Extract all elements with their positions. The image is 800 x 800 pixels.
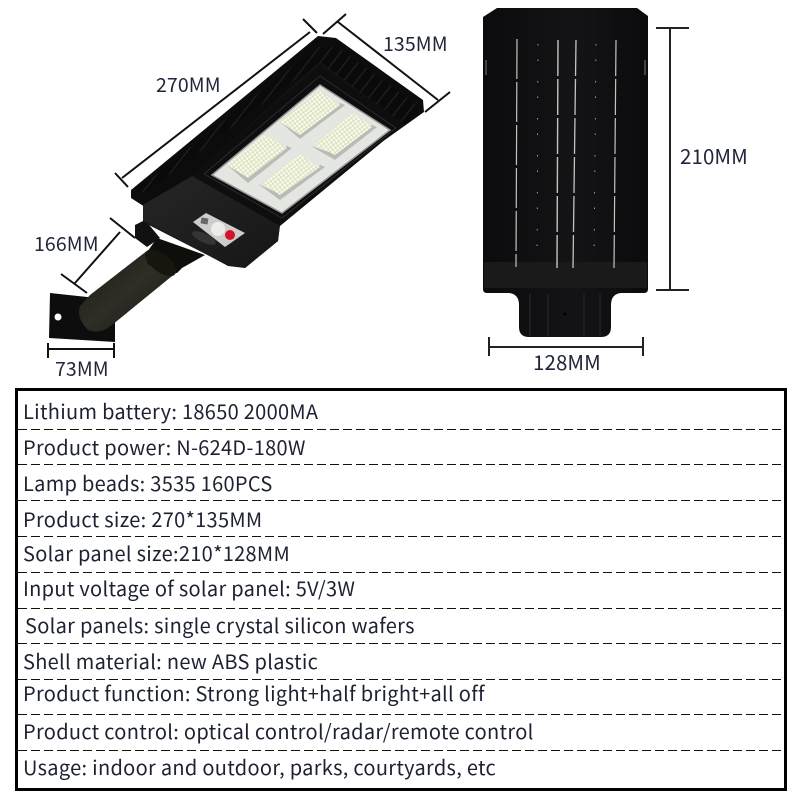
spec: product function: Product function: Strong light+half bright+all off	[23, 678, 485, 707]
dimension: 128MM: 128MM	[533, 346, 601, 376]
dimension: 135MM	[323, 14, 450, 112]
specification table	[15, 388, 787, 791]
spec: product size: Product size: 270*135MM	[23, 504, 262, 533]
LED module right	[311, 113, 377, 160]
dimension: 270MM	[115, 19, 317, 187]
spec: input voltage: Input voltage of solar panel: 5V/3W	[23, 573, 355, 602]
dimension: 166MM: 166MM	[34, 228, 99, 257]
dimension: 135MM: 135MM	[383, 28, 448, 57]
dimension: 210MM: 210MM	[680, 140, 748, 170]
lamp body	[143, 62, 404, 268]
sensor panel	[190, 213, 245, 248]
spec: lithium battery: Lithium battery: 18650 2000MA	[23, 396, 318, 425]
dimension: 270MM: 270MM	[156, 69, 221, 98]
dimension: 73MM: 73MM	[55, 353, 109, 382]
dimension: 73MM	[48, 343, 114, 382]
dimension: 166MM	[34, 218, 135, 293]
product photo: solar street light	[49, 36, 424, 342]
LED module bottom	[258, 155, 325, 200]
solar panel rear view	[483, 8, 648, 337]
LED module top	[280, 90, 345, 139]
LED module left	[227, 135, 292, 183]
spec: product control: Product control: optical control/radar/remote control	[23, 716, 534, 745]
spec: solar panel size: Solar panel size:210*128MM	[23, 538, 290, 567]
spec: usage: Usage: indoor and outdoor, parks, courtyards, etc	[23, 752, 496, 781]
dimension: 128MM	[489, 337, 643, 376]
spec: shell material: Shell material: new ABS plastic	[23, 646, 318, 675]
dimension: 210MM	[656, 28, 748, 290]
solar cell bus lines	[486, 39, 645, 268]
mounting pole	[79, 220, 205, 332]
spec: product power: Product power: N-624D-180W	[23, 432, 306, 461]
LED lens	[212, 85, 390, 213]
lamp housing with rear solar shell	[131, 36, 424, 207]
spec: lamp beads: Lamp beads: 3535 160PCS	[23, 468, 273, 497]
spec: solar panels: Solar panels: single crystal silicon wafers	[25, 610, 415, 639]
wall mounting plate	[49, 293, 115, 342]
